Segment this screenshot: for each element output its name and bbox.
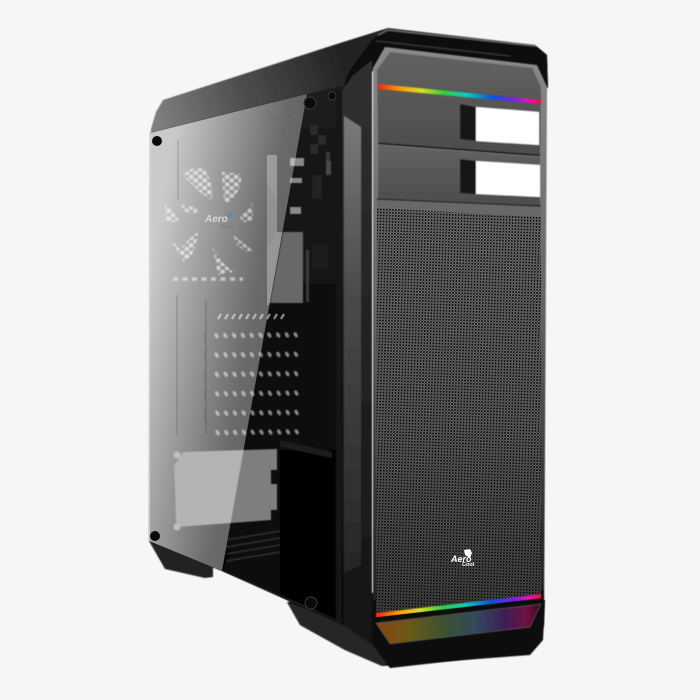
lower RGB strip [376,594,541,618]
glass bracket marks [177,140,207,435]
lower bay cover [378,145,540,205]
mesh panel [376,208,541,613]
side glass with interior [149,90,310,580]
glass left edge highlight [149,134,150,541]
lower colour glow panel [376,604,541,644]
upper RGB strip [378,84,541,104]
upper bay window [460,104,476,141]
glass reflection [149,94,307,571]
logo sub wordmark: Cool [462,562,475,568]
front logo [450,549,475,568]
drive bay clips [290,158,304,214]
power supply [174,449,277,530]
case silhouette [149,28,548,666]
rear frame details [222,90,342,626]
PC tower case illustration [148,27,549,669]
logo mark [464,549,472,558]
fan logo mark [225,209,233,219]
cutout gray square right of reflection [270,232,303,303]
top vents [150,100,300,150]
screw: top left [152,136,162,146]
screw: bottom left [150,531,160,541]
interior under the glass [150,90,310,580]
mesh top rim [377,200,541,217]
logo wordmark: Aero [450,554,472,564]
screw: bottom right [305,597,317,609]
front panel [373,47,547,668]
icon: fan with logo [165,162,278,279]
slanted slots [218,314,284,319]
drive bay strip [267,155,277,305]
glass screws [150,92,336,609]
lower corner shade [373,590,544,668]
side pillar [342,60,372,645]
top black shoulder [342,29,548,90]
side body interior [149,85,345,626]
lower bay window [460,159,476,194]
screw: top far right [328,92,336,100]
screw: top right [304,97,316,109]
upper bay cover [377,52,541,155]
motherboard perforation [212,326,300,442]
front frame [373,47,547,668]
lower black band [376,598,541,623]
fan logo sub text: Cool [220,224,234,230]
fan logo: Aero [204,214,228,225]
top panel [151,28,548,134]
feet [149,541,213,578]
